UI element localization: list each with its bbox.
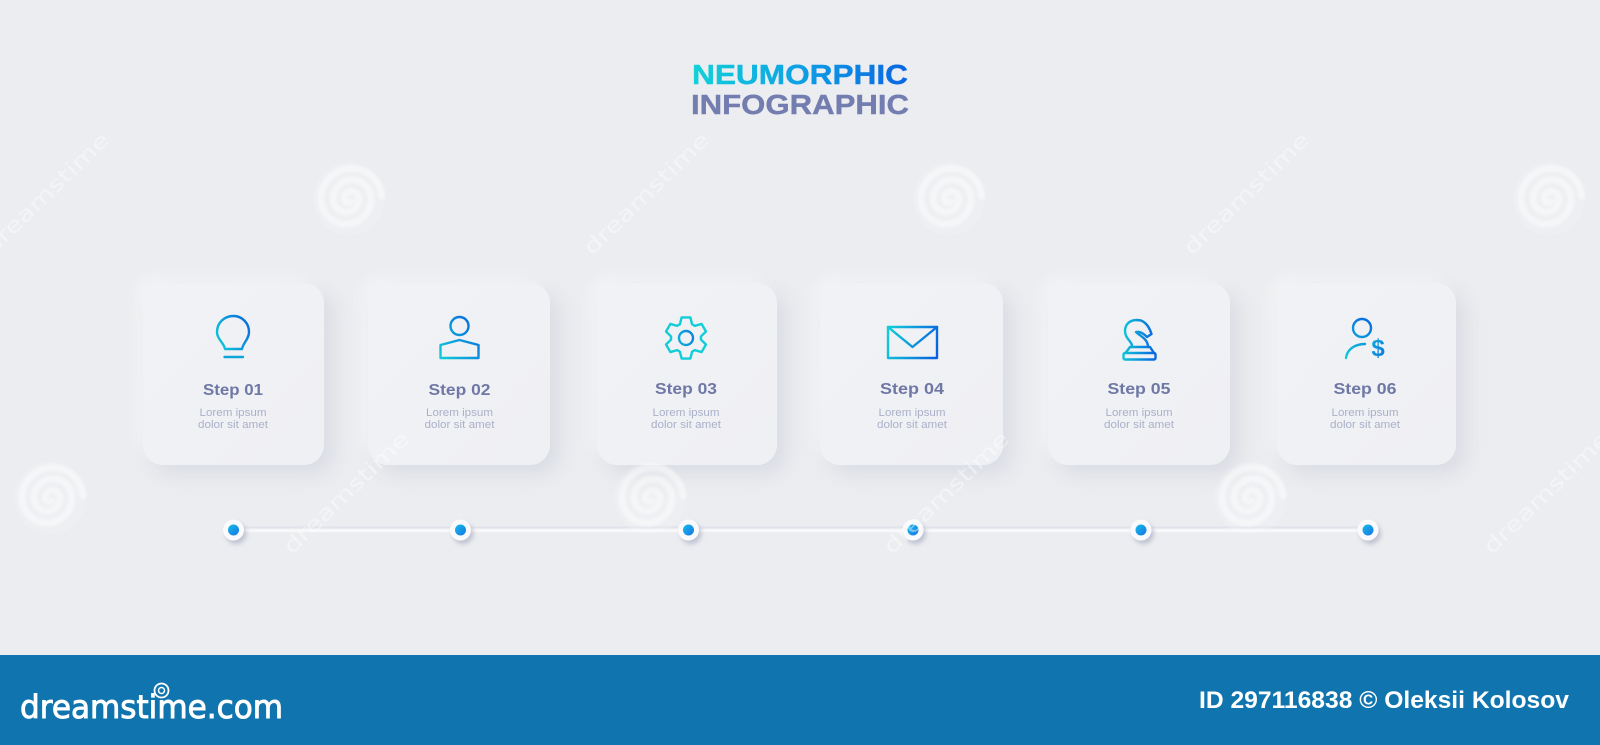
description: dolor sit amet <box>1330 419 1400 431</box>
timeline <box>223 520 1383 546</box>
watermark overlay: dreamstime <box>879 427 1014 559</box>
panel: step 02 <box>368 283 550 465</box>
description: dolor sit amet <box>877 419 947 431</box>
panel: step 05 <box>1048 283 1230 465</box>
title <box>691 59 909 120</box>
description: Lorem ipsum <box>1332 407 1398 419</box>
watermark overlay: dreamstime <box>1479 427 1600 559</box>
timeline dot 5 <box>1130 520 1152 540</box>
description <box>424 407 494 431</box>
panel: step 01 <box>143 283 324 465</box>
logo: dreamstime.com: dreamstime.com <box>20 688 283 726</box>
description <box>1104 407 1174 431</box>
icon: chess knight <box>1124 320 1156 360</box>
description: Lorem ipsum <box>200 407 266 419</box>
image id and author: ID 297116838 © Oleksii Kolosov <box>1199 687 1570 714</box>
description <box>1330 407 1400 431</box>
step label: Step 06 <box>1334 381 1397 398</box>
description: Lorem ipsum <box>426 407 493 419</box>
icon: gear <box>666 317 706 359</box>
step label: Step 04 <box>880 381 944 398</box>
timeline dot 1 <box>223 520 244 540</box>
description: Lorem ipsum <box>652 407 720 419</box>
step label: Step 01 <box>203 382 263 399</box>
footer band <box>0 655 1600 745</box>
description: dolor sit amet <box>424 419 494 431</box>
watermark overlay: dreamstime <box>279 427 414 559</box>
timeline dot 6 <box>1358 520 1378 540</box>
icon: envelope <box>888 327 937 358</box>
description: Lorem ipsum <box>1106 407 1172 419</box>
description: Lorem ipsum <box>878 407 946 419</box>
timeline dot 4 <box>902 520 924 540</box>
panel: step 06 <box>1277 283 1456 465</box>
description: dolor sit amet <box>1104 419 1174 431</box>
description <box>651 407 721 431</box>
icon: person with dollar: $ <box>1371 335 1385 362</box>
watermark overlay: dreamstime <box>579 128 714 260</box>
title: NEUMORPHIC <box>692 59 908 90</box>
icon: light bulb <box>217 316 249 357</box>
watermark overlay: dreamstime <box>1179 128 1314 260</box>
icon: person with dollar <box>1346 319 1385 362</box>
title: INFOGRAPHIC <box>691 89 909 120</box>
description: dolor sit amet <box>651 419 721 431</box>
description: dolor sit amet <box>198 419 268 431</box>
description <box>198 407 268 431</box>
description <box>877 407 947 431</box>
step label: Step 03 <box>655 381 717 398</box>
step label: Step 05 <box>1108 381 1171 398</box>
timeline dot 2 <box>450 520 471 540</box>
panel: step 03 <box>597 283 777 465</box>
timeline dot 3 <box>678 520 699 540</box>
icon: person <box>440 317 478 358</box>
step label: Step 02 <box>428 382 491 399</box>
panel: step 04 <box>820 283 1003 465</box>
